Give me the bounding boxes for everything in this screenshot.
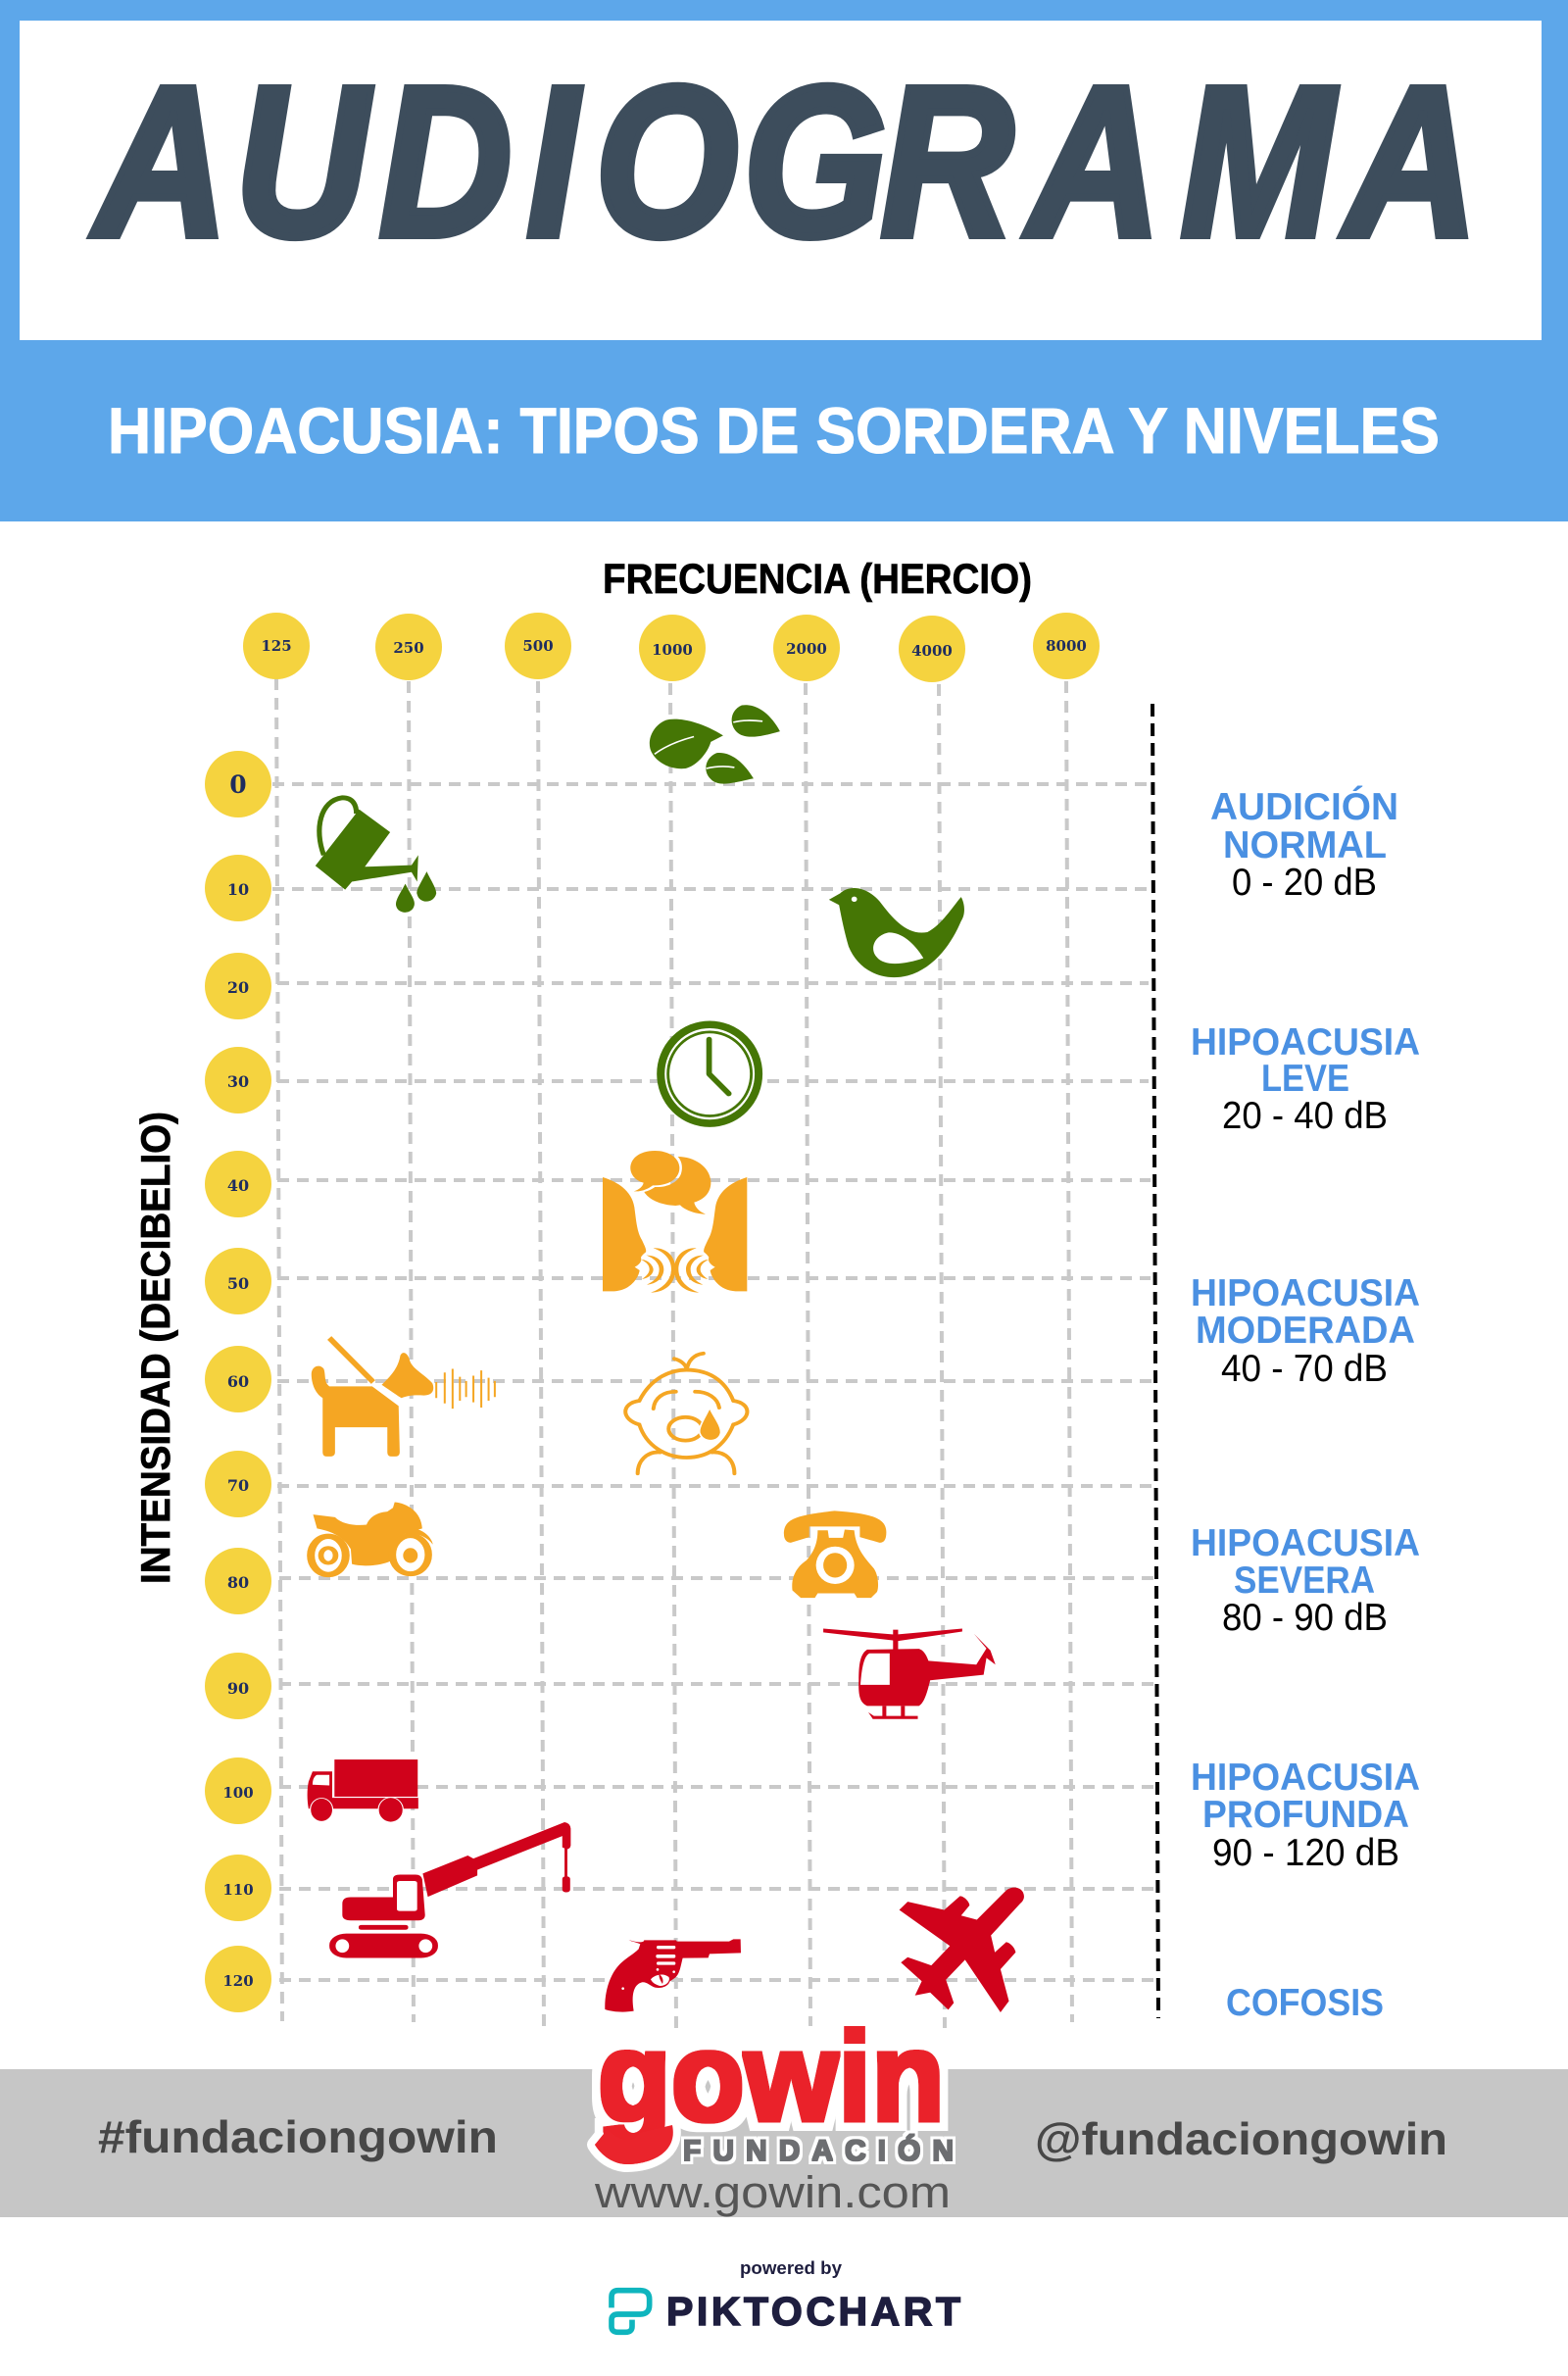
label: audicion normal: NORMAL (1223, 824, 1387, 866)
intensity labels: 60 (227, 1372, 249, 1391)
label: hipoacusia profunda (1191, 1757, 1420, 1874)
frequency labels: 1000 (652, 641, 693, 659)
intensity labels: 70 (227, 1476, 249, 1495)
label: cofosis: COFOSIS (1226, 1982, 1384, 2024)
icon: watering can (316, 798, 436, 913)
label: hipoacusia moderada: 40 - 70 dB (1221, 1348, 1388, 1390)
piktochart wordmark: PIKTOCHART (666, 2289, 960, 2334)
subtitle: HIPOACUSIA: TIPOS DE SORDERA Y NIVELES (108, 394, 1440, 467)
icon: telephone (784, 1510, 886, 1598)
label: hipoacusia severa (1191, 1522, 1420, 1639)
y axis title: INTENSIDAD (DECIBELIO) (132, 1112, 178, 1584)
website: www.gowin.com (594, 2167, 951, 2217)
label: hipoacusia moderada: HIPOACUSIA (1191, 1272, 1420, 1314)
powered by: powered by (740, 2258, 842, 2278)
label: hipoacusia moderada (1191, 1272, 1420, 1390)
icon: people talking (603, 1151, 747, 1293)
icon: clock (661, 1024, 759, 1123)
intensity labels: 0 (229, 770, 247, 799)
icon: truck (308, 1759, 418, 1822)
icon: bird (829, 888, 964, 977)
label: hipoacusia moderada: MODERADA (1196, 1310, 1415, 1352)
frequency labels: 4000 (911, 642, 953, 660)
icon: crying baby (625, 1354, 747, 1473)
intensity labels: 10 (227, 880, 249, 899)
intensity labels: 30 (227, 1072, 249, 1091)
frequency labels: 125 (261, 637, 292, 655)
header band (0, 0, 1568, 521)
label: hipoacusia leve: LEVE (1261, 1058, 1349, 1100)
label: hipoacusia leve: 20 - 40 dB (1222, 1095, 1388, 1137)
footer band (0, 2069, 1568, 2217)
frequency labels: 2000 (786, 640, 827, 658)
handle: @fundaciongowin (1035, 2113, 1447, 2164)
intensity labels: 50 (227, 1274, 249, 1293)
icon: airplane (900, 1888, 1024, 2012)
label: audicion normal: AUDICIÓN (1210, 785, 1398, 828)
x axis title: FRECUENCIA (HERCIO) (603, 556, 1032, 603)
intensity labels: 90 (227, 1679, 249, 1698)
label: audicion normal (1210, 785, 1398, 904)
frequency labels: 500 (522, 637, 554, 655)
label: hipoacusia leve: HIPOACUSIA (1191, 1021, 1420, 1064)
label: hipoacusia profunda: PROFUNDA (1202, 1794, 1409, 1836)
hashtag: #fundaciongowin (98, 2111, 498, 2162)
frequency labels: 250 (393, 639, 424, 657)
intensity labels: 20 (227, 978, 249, 997)
label: hipoacusia severa: 80 - 90 dB (1222, 1597, 1388, 1639)
logo: gowin: gowin (598, 2006, 945, 2148)
intensity labels: 80 (227, 1573, 249, 1592)
frequency labels: 8000 (1046, 637, 1087, 655)
logo: fundacion: FUNDACIÓN (683, 2134, 954, 2167)
intensity labels: 100 (222, 1784, 254, 1802)
label: hipoacusia profunda: 90 - 120 dB (1212, 1832, 1399, 1874)
icon: piktochart logo (612, 2291, 650, 2332)
intensity labels (205, 751, 271, 2012)
intensity labels: 120 (222, 1972, 254, 1990)
label: audicion normal: 0 - 20 dB (1232, 862, 1377, 904)
title: AUDIOGRAMA (91, 43, 1478, 281)
icon: crane (329, 1822, 570, 1958)
icon: helicopter (823, 1628, 996, 1719)
label: hipoacusia severa: HIPOACUSIA (1191, 1522, 1420, 1564)
label: hipoacusia profunda: HIPOACUSIA (1191, 1757, 1420, 1799)
icon: revolver (605, 1939, 741, 2012)
frequency labels (243, 613, 1100, 682)
icon: dog barking (312, 1338, 495, 1457)
intensity labels: 40 (227, 1176, 249, 1195)
intensity labels: 110 (222, 1881, 254, 1899)
icon: leaves (650, 705, 780, 784)
icon: motorcycle (311, 1503, 433, 1574)
label: hipoacusia severa: SEVERA (1234, 1559, 1375, 1602)
label: hipoacusia leve (1191, 1021, 1420, 1137)
